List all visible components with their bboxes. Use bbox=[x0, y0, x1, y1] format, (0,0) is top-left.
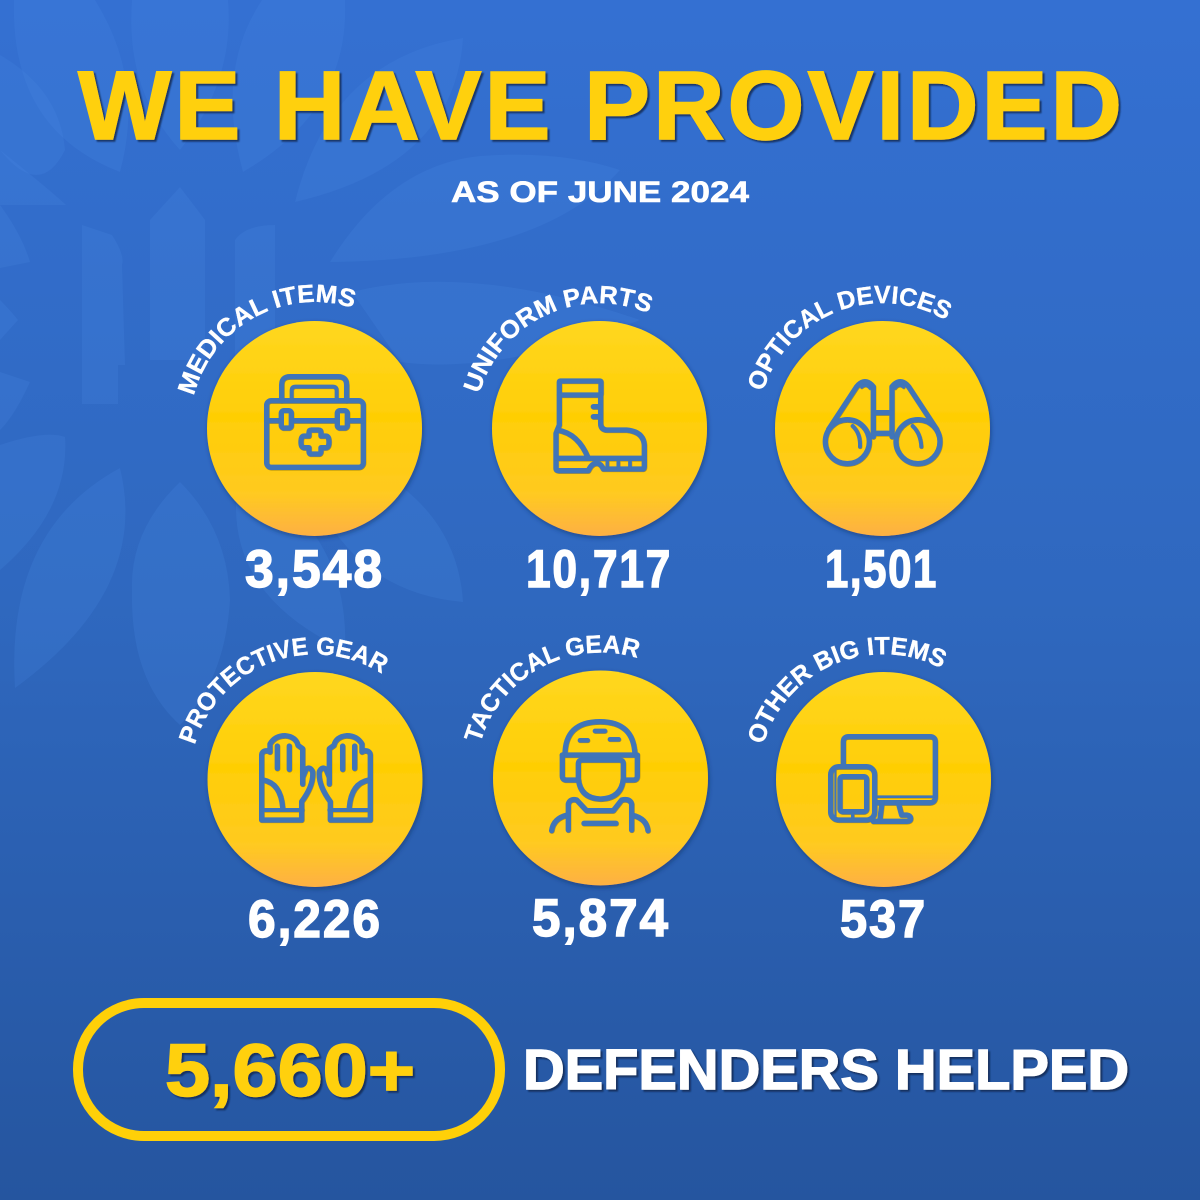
arc label: optical devices: OPTICAL DEVICES bbox=[748, 286, 952, 389]
arc label: protective gear: PROTECTIVE GEAR bbox=[178, 637, 388, 744]
subtitle: AS OF JUNE 2024 bbox=[451, 176, 749, 209]
yellow disc bbox=[775, 321, 990, 536]
panel: tactical gear bbox=[464, 635, 711, 948]
icon: gloves bbox=[262, 736, 370, 820]
label: defenders helped: DEFENDERS HELPED bbox=[523, 1038, 1129, 1102]
icon: medical kit bbox=[267, 377, 363, 467]
panel: medical items bbox=[178, 284, 426, 599]
title: WE HAVE PROVIDED bbox=[78, 51, 1125, 160]
value: 10,717: 10,717 bbox=[526, 540, 672, 599]
panel: protective gear bbox=[178, 637, 426, 949]
arc label: medical items: MEDICAL ITEMS bbox=[178, 284, 356, 395]
panel: other big items bbox=[749, 636, 994, 949]
value: 6,226: 6,226 bbox=[248, 890, 382, 949]
value: 5,874: 5,874 bbox=[532, 889, 670, 948]
icon: monitor and tablet bbox=[831, 737, 935, 821]
panel: optical devices bbox=[748, 286, 994, 599]
value: 537: 537 bbox=[840, 890, 927, 949]
yellow disc bbox=[776, 672, 991, 887]
arc label: tactical gear: TACTICAL GEAR bbox=[464, 635, 640, 739]
icon: soldier with helmet bbox=[552, 722, 648, 831]
icon: binoculars bbox=[825, 382, 940, 464]
icon: boot bbox=[556, 381, 644, 471]
yellow disc bbox=[208, 672, 422, 887]
yellow disc bbox=[493, 670, 708, 886]
yellow disc bbox=[492, 321, 707, 536]
value: 3,548: 3,548 bbox=[245, 540, 384, 599]
yellow disc bbox=[207, 321, 422, 536]
value: 5,660+: 5,660+ bbox=[165, 1029, 415, 1112]
value: 1,501: 1,501 bbox=[825, 540, 938, 599]
pill outline bbox=[78, 1003, 500, 1136]
panel: uniform parts bbox=[463, 286, 710, 599]
arc label: uniform parts: UNIFORM PARTS bbox=[463, 286, 652, 391]
arc label: other big items: OTHER BIG ITEMS bbox=[749, 636, 946, 742]
panel: defenders helped bbox=[78, 1003, 1129, 1136]
